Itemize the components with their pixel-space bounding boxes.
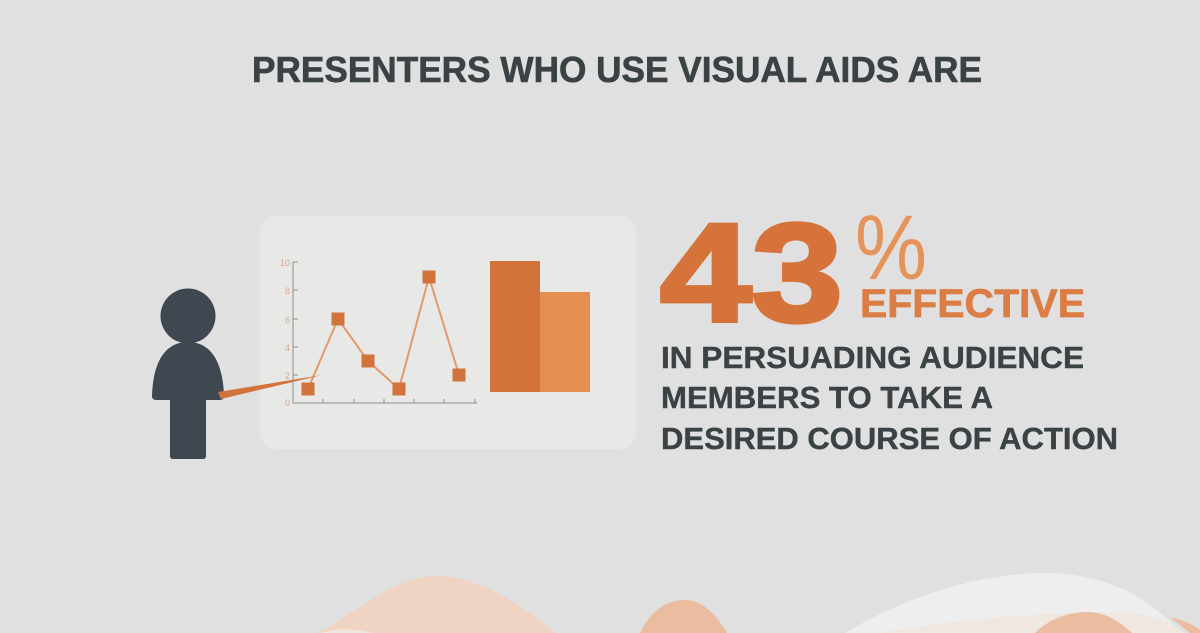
y axis labels: 2 xyxy=(285,371,290,381)
data line xyxy=(308,277,459,389)
y axis labels: 6 xyxy=(285,315,290,325)
description text xyxy=(661,340,1118,456)
effective label: EFFECTIVE xyxy=(860,282,1085,326)
decorative bottom waves xyxy=(318,573,1200,633)
description text: MEMBERS TO TAKE A xyxy=(661,380,993,415)
icon: presenter figure xyxy=(152,288,224,459)
y axis labels: 0 xyxy=(285,398,290,408)
data markers xyxy=(302,270,466,396)
percent sign: % xyxy=(855,197,927,299)
bar chart xyxy=(490,261,590,392)
title: PRESENTERS WHO USE VISUAL AIDS ARE xyxy=(252,49,982,90)
y axis labels: 8 xyxy=(285,286,290,296)
pointer stick xyxy=(218,375,322,399)
description text: DESIRED COURSE OF ACTION xyxy=(661,421,1118,456)
description text: IN PERSUADING AUDIENCE xyxy=(661,340,1084,375)
y axis labels: 4 xyxy=(285,343,290,353)
panel: presentation screen xyxy=(260,216,636,450)
stat number 43: 43 xyxy=(660,194,843,351)
chart axes xyxy=(293,262,477,403)
line chart xyxy=(280,258,477,408)
y axis labels xyxy=(280,258,290,408)
y axis labels: 10 xyxy=(280,258,290,268)
